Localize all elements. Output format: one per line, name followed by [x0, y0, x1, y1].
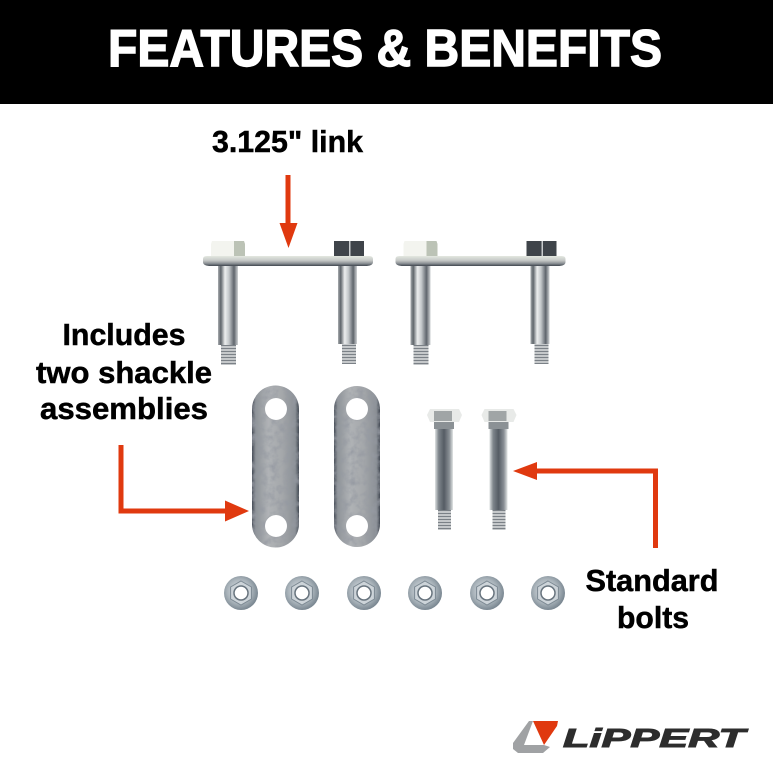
- nuts: [224, 576, 565, 610]
- link plate 1: [252, 386, 299, 548]
- label: assemblies: Includes: [62, 317, 186, 352]
- bolt 1: [427, 409, 462, 530]
- link plate 2: [334, 386, 380, 547]
- label: assemblies: [36, 317, 212, 426]
- label: bolts: [586, 563, 718, 635]
- label: bolts: bolts: [617, 600, 689, 635]
- shackle assembly 1: [203, 241, 373, 365]
- arrow: assemblies: [118, 445, 249, 522]
- header banner: [0, 0, 773, 104]
- label: link size: 3.125" link: [212, 124, 364, 159]
- logo: [513, 721, 749, 753]
- shackle assembly 2: [396, 241, 566, 365]
- label: assemblies: two shackle: [36, 355, 212, 390]
- arrow: bolts: [513, 462, 658, 548]
- bolt 2: [482, 409, 516, 530]
- label: bolts: Standard: [586, 563, 718, 598]
- logo: LiPPERT: [563, 723, 749, 753]
- arrow: link: [280, 175, 298, 248]
- label: assemblies: assemblies: [40, 391, 208, 426]
- title: FEATURES & BENEFITS: [108, 20, 662, 78]
